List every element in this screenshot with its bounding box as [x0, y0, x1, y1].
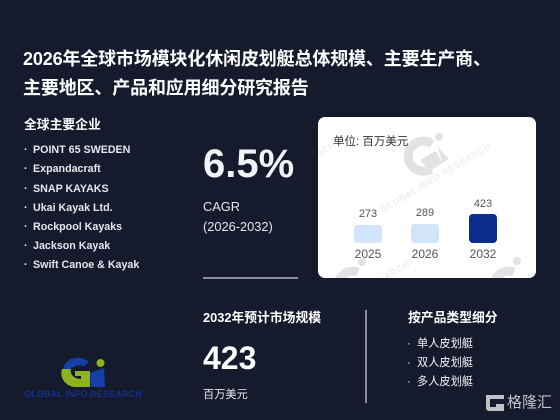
panel: 2032 market size: [203, 310, 321, 401]
watermark: Gelonghui: [486, 394, 552, 411]
vertical divider: [365, 310, 367, 403]
bar 2026: [411, 207, 439, 261]
company list: Swift Canoe & Kayak: [33, 259, 139, 271]
bar 2025: [354, 208, 382, 261]
logo wordmark: GLOBAL INFO RESEARCH: [24, 389, 142, 399]
CAGR label: [203, 199, 273, 234]
company list: ·: [24, 202, 28, 214]
CAGR value: 6.5%: [203, 142, 294, 186]
segment list: ·: [407, 338, 411, 350]
panel: product type segments: [407, 310, 498, 388]
company list: ·: [24, 183, 28, 195]
icon: G logo: [486, 395, 504, 411]
company list: ·: [24, 259, 28, 271]
bar 2032: 423: [474, 198, 492, 210]
CAGR label: (2026-2032): [203, 219, 273, 234]
title: 主要地区、产品和应用细分研究报告: [23, 78, 309, 98]
company list: POINT 65 SWEDEN: [33, 144, 130, 156]
bar 2026: 2026: [412, 247, 438, 261]
bar 2025: 273: [359, 208, 377, 220]
heading: by product type: 按产品类型细分: [408, 310, 498, 325]
segment list: [407, 337, 473, 388]
heading: key companies: 全球主要企业: [24, 117, 101, 132]
brand name: 格隆汇: [507, 394, 552, 411]
segment list: 单人皮划艇: [417, 338, 473, 350]
bar 2026: 289: [416, 207, 434, 219]
bar 2025: 2025: [355, 247, 381, 261]
panel: bar chart card: [318, 117, 536, 278]
heading: forecast market size: 2032年预计市场规模: [203, 310, 321, 325]
logo: Global Info Research: [24, 358, 142, 399]
panel: key companies: [24, 117, 140, 271]
market size unit: 百万美元: [203, 389, 248, 401]
watermark: [318, 133, 521, 278]
segment list: 双人皮划艇: [417, 357, 473, 369]
company list: Jackson Kayak: [33, 240, 110, 252]
segment list: ·: [407, 376, 411, 388]
segment list: 多人皮划艇: [417, 376, 473, 388]
segment list: ·: [407, 357, 411, 369]
company list: [24, 144, 140, 271]
company list: Rockpool Kayaks: [33, 221, 122, 233]
company list: Expandacraft: [33, 163, 101, 175]
watermark: GLOBAL INFO RESEARCH: [379, 141, 493, 215]
company list: ·: [24, 221, 28, 233]
title: [23, 49, 491, 98]
bar 2032: [469, 198, 497, 261]
bar chart: [354, 198, 497, 261]
company list: ·: [24, 163, 28, 175]
title: 2026年全球市场模块化休闲皮划艇总体规模、主要生产商、: [23, 49, 491, 69]
company list: ·: [24, 144, 28, 156]
bar 2032: 2032: [470, 247, 496, 261]
market size value: 423: [203, 340, 256, 376]
company list: Ukai Kayak Ltd.: [33, 202, 113, 214]
unit label: 单位: 百万美元: [333, 136, 408, 148]
CAGR label: CAGR: [203, 199, 240, 214]
CAGR divider: [203, 277, 298, 279]
company list: ·: [24, 240, 28, 252]
company list: SNAP KAYAKS: [33, 183, 109, 195]
icon: Gi mark: [61, 358, 105, 387]
